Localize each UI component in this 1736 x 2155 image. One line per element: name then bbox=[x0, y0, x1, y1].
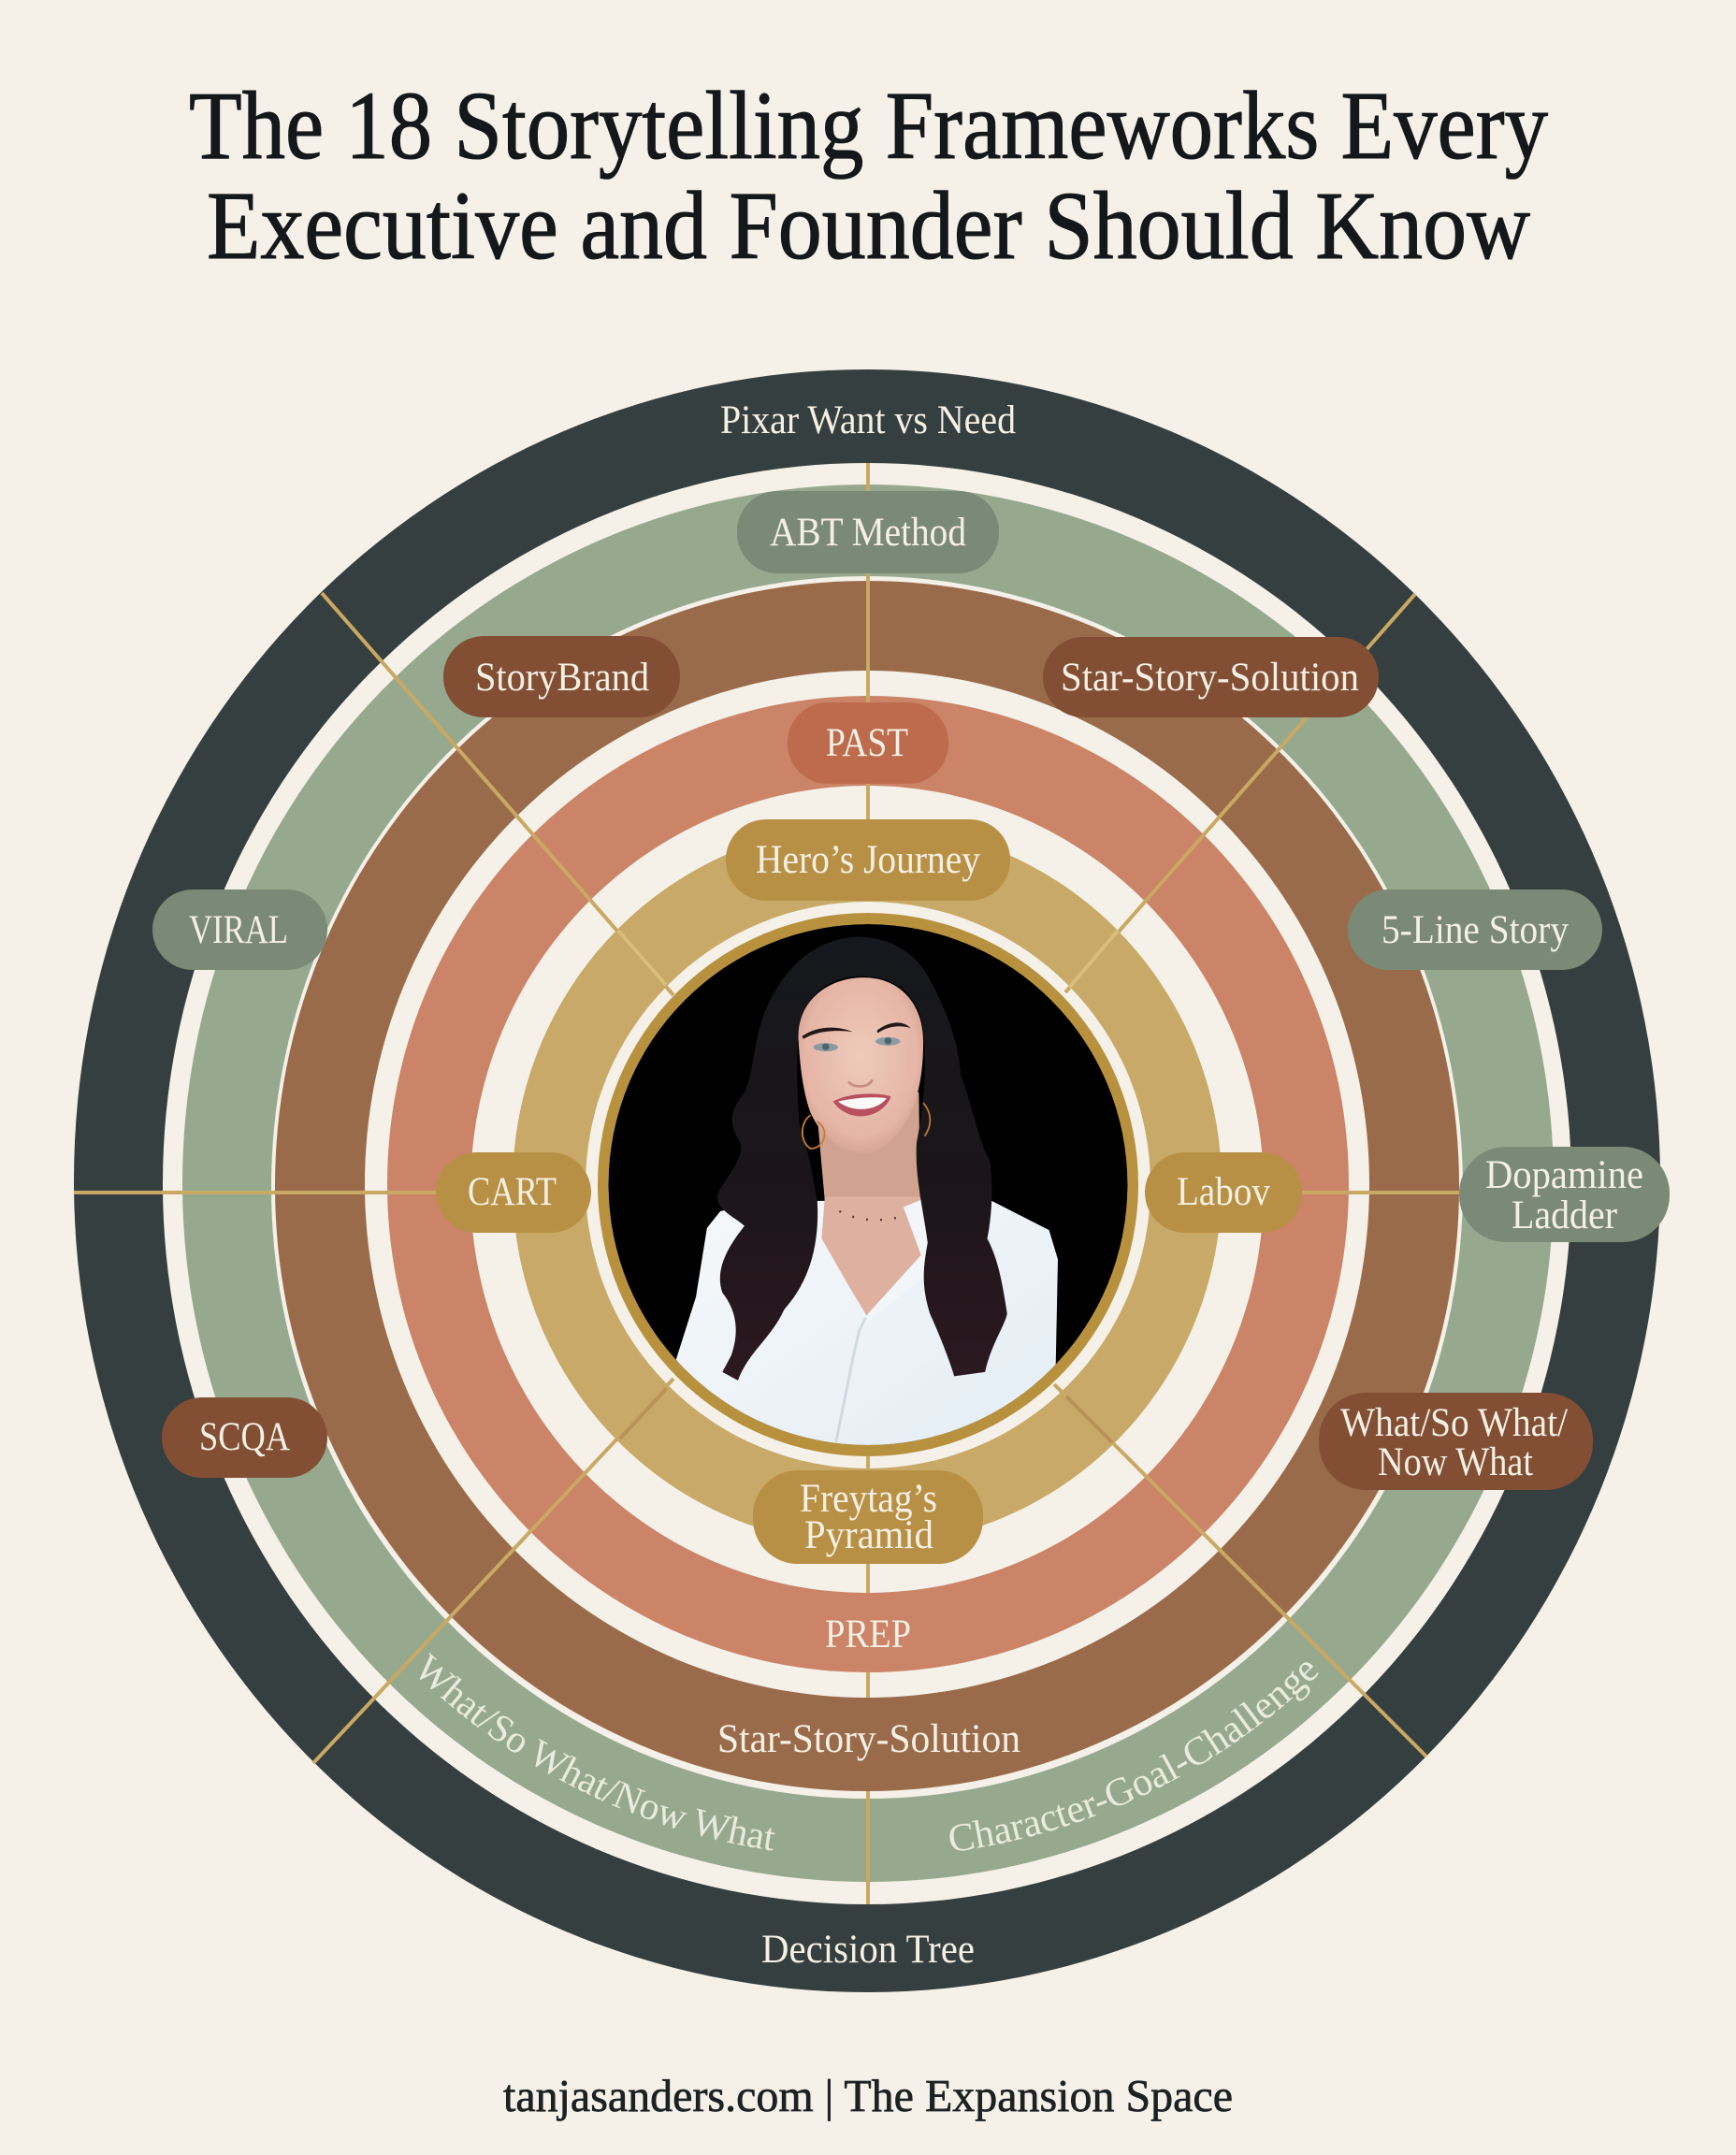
pill: Dopamine Ladder bbox=[1459, 1147, 1670, 1242]
gold photo frame bbox=[598, 913, 1138, 1456]
pill: VIRAL: VIRAL bbox=[189, 908, 288, 952]
ring: tan bbox=[513, 825, 1222, 1545]
label: Pixar Want vs Need: Pixar Want vs Need bbox=[720, 398, 1016, 442]
footer: tanjasanders.com | The Expansion Space bbox=[503, 2070, 1233, 2121]
ring: sage green bbox=[182, 485, 1554, 1882]
portrait photo bbox=[598, 913, 1138, 1468]
pill: Hero's Journey: Hero’s Journey bbox=[756, 838, 980, 882]
pill: Star-Story-Solution top bbox=[1043, 637, 1379, 717]
pills bbox=[152, 491, 1670, 1564]
pill: StoryBrand bbox=[443, 636, 680, 717]
spokes bbox=[74, 463, 1464, 1904]
ring labels bbox=[419, 398, 1319, 1972]
pill: VIRAL bbox=[152, 889, 327, 970]
title: The 18 Storytelling Frameworks Every bbox=[189, 72, 1548, 180]
label: Star-Story-Solution bottom: Star-Story-Solution bbox=[717, 1717, 1020, 1761]
ring: salmon bbox=[387, 696, 1349, 1672]
pill: ABT Method: ABT Method bbox=[770, 511, 966, 555]
pill: What/So What/Now What: What/So What/ bbox=[1340, 1401, 1568, 1445]
pill: 5-Line Story: 5-Line Story bbox=[1382, 908, 1569, 952]
curved label: Character-Goal-Challenge: Character-Goal-Challenge bbox=[949, 1662, 1319, 1851]
pill: SCQA bbox=[162, 1397, 327, 1478]
title bbox=[189, 72, 1548, 280]
pill: PAST bbox=[788, 702, 948, 784]
pill: StoryBrand: StoryBrand bbox=[475, 656, 649, 700]
pill: Labov: Labov bbox=[1177, 1170, 1270, 1214]
label: Decision Tree: Decision Tree bbox=[761, 1928, 975, 1972]
pill: Dopamine Ladder: Dopamine bbox=[1485, 1153, 1643, 1197]
pill: Labov bbox=[1145, 1152, 1302, 1233]
curved label: What/So What/Now What: What/So What/Now What bbox=[419, 1653, 774, 1850]
pill: 5-Line Story bbox=[1348, 889, 1602, 970]
title: Executive and Founder Should Know bbox=[207, 172, 1530, 280]
ring: brown bbox=[275, 581, 1459, 1791]
pill: CART: CART bbox=[468, 1170, 557, 1214]
ring: outer dark bbox=[74, 369, 1660, 1992]
pill: Star-Story-Solution top: Star-Story-Solution bbox=[1061, 656, 1359, 700]
photo circle bbox=[608, 924, 1128, 1468]
pill: CART bbox=[436, 1152, 591, 1233]
pill: Freytag's Pyramid: Freytag’s bbox=[800, 1477, 937, 1521]
pill: Freytag's Pyramid bbox=[753, 1470, 983, 1564]
pill: Freytag's Pyramid: Pyramid bbox=[804, 1513, 933, 1557]
label: PREP: PREP bbox=[825, 1613, 911, 1656]
pill: Hero's Journey bbox=[726, 819, 1010, 901]
pill: ABT Method bbox=[737, 491, 999, 573]
pill: What/So What/Now What bbox=[1319, 1393, 1593, 1490]
concentric rings bbox=[74, 369, 1660, 1992]
pill: What/So What/Now What: Now What bbox=[1378, 1440, 1533, 1484]
pill: SCQA: SCQA bbox=[199, 1415, 290, 1459]
pill: Dopamine Ladder: Ladder bbox=[1512, 1193, 1617, 1237]
pill: PAST: PAST bbox=[826, 721, 908, 765]
